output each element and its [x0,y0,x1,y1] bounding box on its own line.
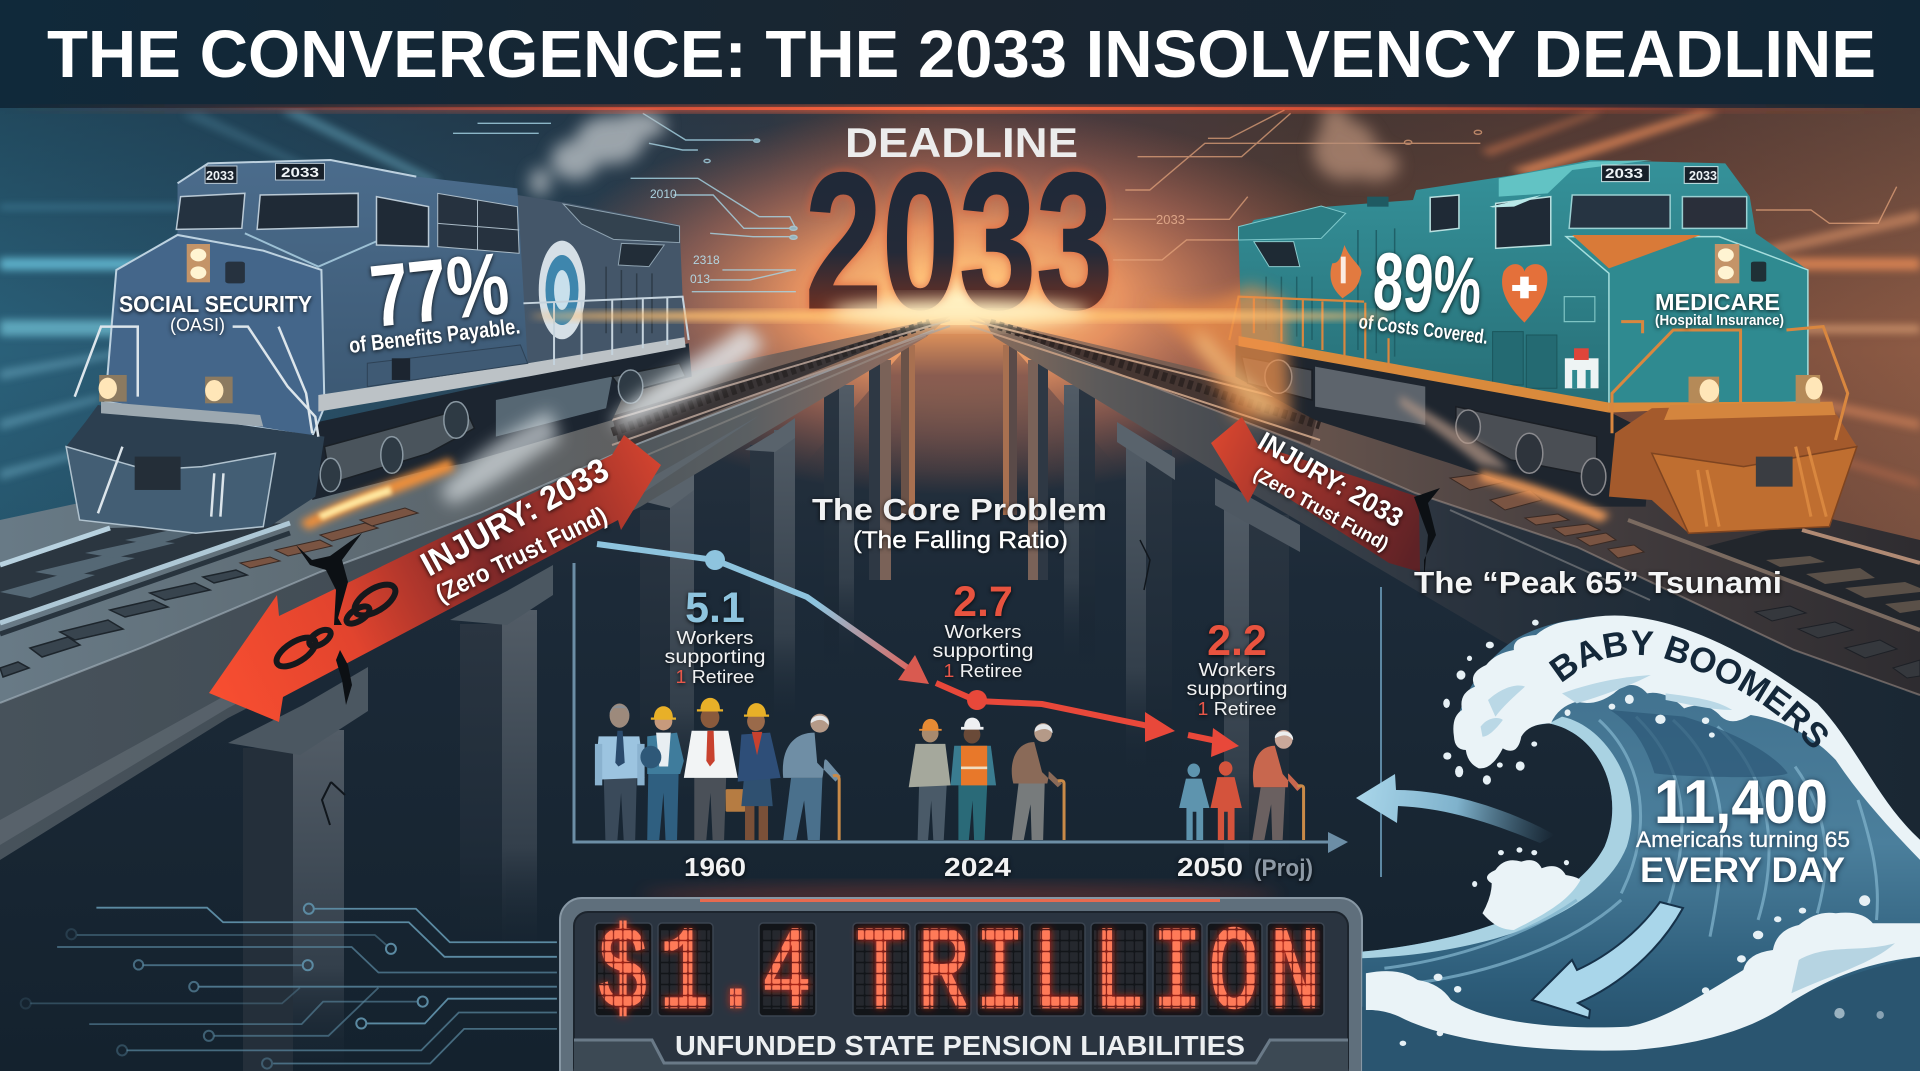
circuit label: top right: 2033 [1156,212,1185,227]
undercarriage [312,343,692,500]
ratio 2050: 2.2: 2.2 [1207,617,1267,665]
left train stat: 77%: 77% [366,233,513,346]
circuit labels: top left: 2318 [693,253,720,267]
wave body [1362,616,1920,1071]
briefcase [726,789,746,812]
deadline label: DEADLINE [845,119,1078,166]
ratio 2024: 2.7: 1 Retiree [944,661,1022,681]
right train: Medicare locomotive [1229,160,1857,533]
right train label: Medicare: MEDICARE [1655,289,1780,315]
left train stat: 77%: of Benefits Payable. [348,313,521,358]
worker 6 [951,718,996,840]
deadline year 2033: 2033 [805,133,1113,350]
wave stat: 11,400: 11,400 [1654,768,1828,837]
bottom-left circuit traces [21,904,557,1069]
rear hood [517,195,684,363]
wheels [1265,360,1606,495]
mid bridge pillars left [630,418,795,800]
right bridge pillars [1117,422,1300,905]
sparks: left train [300,458,455,530]
chasm below the bridges [0,330,1920,1071]
cab side windows [377,197,429,247]
background: speed streaks right [1480,110,1920,488]
wave stat: 11,400: EVERY DAY [1640,851,1845,890]
ratio 1960: 5.1: 5.1 [685,584,745,632]
orange chevron [1572,235,1701,268]
title: THE CONVERGENCE: THE 2033 INSOLVENCY DEADLINE [47,17,1876,92]
x axis year labels: 2050 [1177,852,1243,882]
hood vents [1266,228,1395,357]
undercarriage [1235,345,1652,507]
front headlights [1689,377,1719,403]
ratio 2050: 2.2: supporting [1186,679,1288,700]
distant bridge pillars [824,345,1095,665]
chart heading: The Core Problem: The Core Problem [812,492,1107,527]
title bar [0,0,1920,112]
right train label: Medicare [1655,289,1784,329]
chart heading: The Core Problem [812,492,1107,554]
right train stat: 89%: of Costs Covered. [1357,311,1489,349]
LED unlit dots [598,929,1321,1009]
ratio 1960: 5.1: supporting [664,647,766,668]
front handrails [75,327,318,517]
wave body streaks [1384,717,1877,983]
stripe [318,337,686,412]
left train: Social Security locomotive [66,160,692,533]
bottom foam [1366,913,1920,1051]
truck side frames [1456,407,1597,477]
right train label: Medicare: (Hospital Insurance) [1655,313,1784,329]
left train label: Social Security: SOCIAL SECURITY [119,291,312,317]
injury text left: (Zero Trust Fund) [431,501,612,608]
sparks: right train [1400,395,1610,522]
rear cab roof [563,204,680,243]
windshield [176,193,245,229]
injury text left: INJURY: 2033 [415,451,615,584]
front handrails [1612,322,1848,527]
circuit labels: top left: 2010 [650,187,677,201]
arrow from wave to chart [1356,774,1555,843]
orange stripe [1239,336,1609,413]
rear cab roof [1239,206,1346,240]
wheels [320,370,643,492]
rear handrail [1229,297,1389,369]
people: 2024 group, two workers and a retiree [909,718,1064,840]
right bridge deck [975,316,1920,860]
right train plates text [1605,165,1717,183]
smoke: left train [530,111,666,196]
injury text right: (Zero Trust Fund) [1250,464,1392,556]
left train plates text [206,164,319,183]
left train plates text: 2033 [281,164,319,180]
plates [205,166,237,183]
left bridge deck [0,316,950,860]
central horizon glow [530,105,1390,495]
tsunami wave [1362,616,1920,1071]
left train label: Social Security: (OASI) [170,315,225,335]
crack through deck and arrow [296,533,362,705]
ratio 2024: 2.7: 2.7 [953,578,1013,626]
left bridge pillars [228,565,553,1071]
tsunami heading: The “Peak 65” Tsunami [1414,565,1782,600]
worker 5 [909,719,951,840]
side vents [1493,332,1523,385]
horizon flare [530,300,1390,324]
white crest [1453,616,1920,860]
fuel tank [1315,367,1425,425]
windshields [1569,195,1670,228]
leaf emblem [1330,245,1361,298]
steam: left track [440,325,765,505]
main cab body [116,160,528,437]
ratio 2050: 2.2 [1186,617,1288,719]
crest shading [1481,675,1732,737]
front lower body [66,405,324,533]
x axis year labels: 2024 [944,852,1012,882]
left far track [612,320,950,450]
back foam [1482,860,1580,930]
inner wave sheen [1362,717,1632,958]
left near track [0,508,418,677]
right train stat: 89%: 89% [1371,236,1484,333]
circuit labels: top left [650,187,720,286]
retiree 1960 [783,714,841,840]
x axis year labels: (Proj) [1254,855,1313,882]
outlined hospital icon [1564,297,1595,322]
ratio 2050: 2.2: Workers [1198,660,1276,680]
x axis year labels [684,852,1313,882]
worker 8 [1210,761,1242,840]
dark shade in wave [1610,710,1788,777]
retiree 2050 [1252,730,1304,840]
wave stat: 11,400: Americans turning 65 [1636,827,1850,852]
lower sea [1362,957,1920,1071]
lower panels [367,345,528,387]
right far track [970,320,1320,445]
LED cells [595,923,1324,1016]
worker 3 [684,698,738,840]
left injury arrow band [209,435,661,722]
left train plates text: 2033 [206,168,234,183]
worker 2 [640,706,684,840]
side windows [1496,197,1551,248]
wave label: Baby Boomers: BABY BOOMERS [1548,630,1828,748]
hood vents [606,267,652,333]
divider line beside tsunami [1380,587,1382,877]
left train stat: 77% [348,233,521,358]
nose [105,235,324,437]
crack on right deck [1414,488,1440,580]
rear handrail [523,297,689,365]
background: sky band [0,100,1920,860]
seal [539,241,585,339]
heart with cross [1502,264,1547,323]
chart heading: The Core Problem: (The Falling Ratio) [853,527,1068,554]
trend arrow towards 2050 [1188,728,1239,757]
ratio 2050: 2.2: 1 Retiree [1198,699,1276,719]
top headlights [187,244,210,282]
truck side frames [324,408,474,483]
right train stat: 89% [1357,236,1489,349]
right injury arrow band [1211,417,1440,580]
people: 2050 group, two workers and a retiree [1179,730,1304,840]
teal body [1239,160,1808,410]
left train label: Social Security [119,291,312,335]
top headlights [1715,244,1739,283]
fuel tank [496,377,612,437]
LED value text: $1.4 TRILLION [597,908,1321,1043]
LED caption: UNFUNDED STATE PENSION LIABILITIES [675,1030,1245,1061]
deadline year 2033: 2033 [805,133,1113,350]
circuit labels: top left: 013 [690,272,710,286]
ratio 1960: 5.1: Workers [676,628,754,648]
worker 4 [738,703,781,840]
trend line 2024 to 2050 [936,683,1175,742]
broken chain icon [272,578,400,672]
ratio 2024: 2.7 [932,578,1034,681]
front headlights [99,375,127,402]
injury text right: INJURY: 2033 [1253,426,1408,533]
right train plates text: 2033 [1689,168,1717,183]
flames: right track [1150,285,1290,420]
circuit lines: top left [453,113,797,292]
ratio 1960: 5.1 [664,584,766,687]
retiree 2024 [1012,723,1064,840]
roof highlight [1499,160,1652,197]
right train plates text: 2033 [1605,165,1643,181]
ratio 2024: 2.7: supporting [932,641,1034,662]
background: speed streaks left [0,110,440,480]
droplets [1400,620,1884,1046]
trend line 1960 to 2024 [597,544,929,684]
hospital icon [1565,348,1599,388]
nose [1566,237,1808,410]
x axis year labels: 1960 [684,852,746,882]
circuit lines: top right [1113,110,1897,260]
chart axes [574,563,1348,853]
plates [1602,165,1649,182]
LED panel: unfunded pension liabilities [560,886,1362,1071]
ratio 1960: 5.1: 1 Retiree [676,667,754,687]
worker 1 [595,704,645,840]
worker 7 [1179,764,1209,840]
right near track [1450,470,1920,678]
orange plow [1609,403,1857,533]
people: 1960 group, four workers and a retiree [595,698,841,840]
wave stat: 11,400 [1636,768,1850,890]
foam shading [1791,943,1895,993]
smoke: right train [1313,106,1399,181]
ratio 2024: 2.7: Workers [944,622,1022,642]
arrow down inside wave [1532,902,1683,1018]
